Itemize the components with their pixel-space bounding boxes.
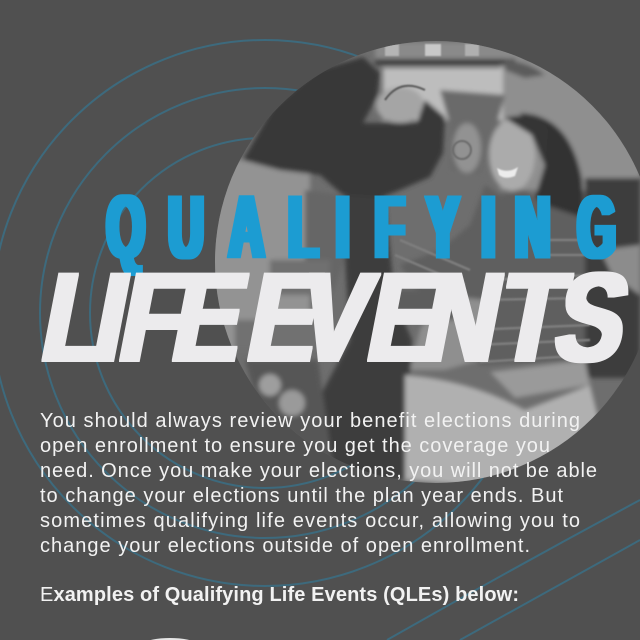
title: LIFE EVENTS: LIFEEVENTS	[32, 246, 640, 388]
next-section circle top	[146, 638, 194, 640]
intro paragraph: sometimes qualifying life events occur, allowing you to	[40, 510, 580, 532]
photo: woman and child in circle	[200, 40, 640, 490]
intro paragraph: change your elections outside of open enrollment.	[40, 535, 530, 557]
intro paragraph: need. Once you make your elections, you will not be able	[40, 460, 597, 482]
intro paragraph	[40, 410, 597, 557]
intro paragraph: You should always review your benefit elections during	[40, 410, 580, 432]
intro paragraph: to change your elections until the plan year ends. But	[40, 485, 563, 507]
title: QUALIFYING: QUALIFYING	[107, 178, 616, 278]
intro paragraph: open enrollment to ensure you get the coverage you	[40, 435, 550, 457]
subheading: examples: Examples of Qualifying Life Events (QLEs) below:	[40, 584, 519, 606]
